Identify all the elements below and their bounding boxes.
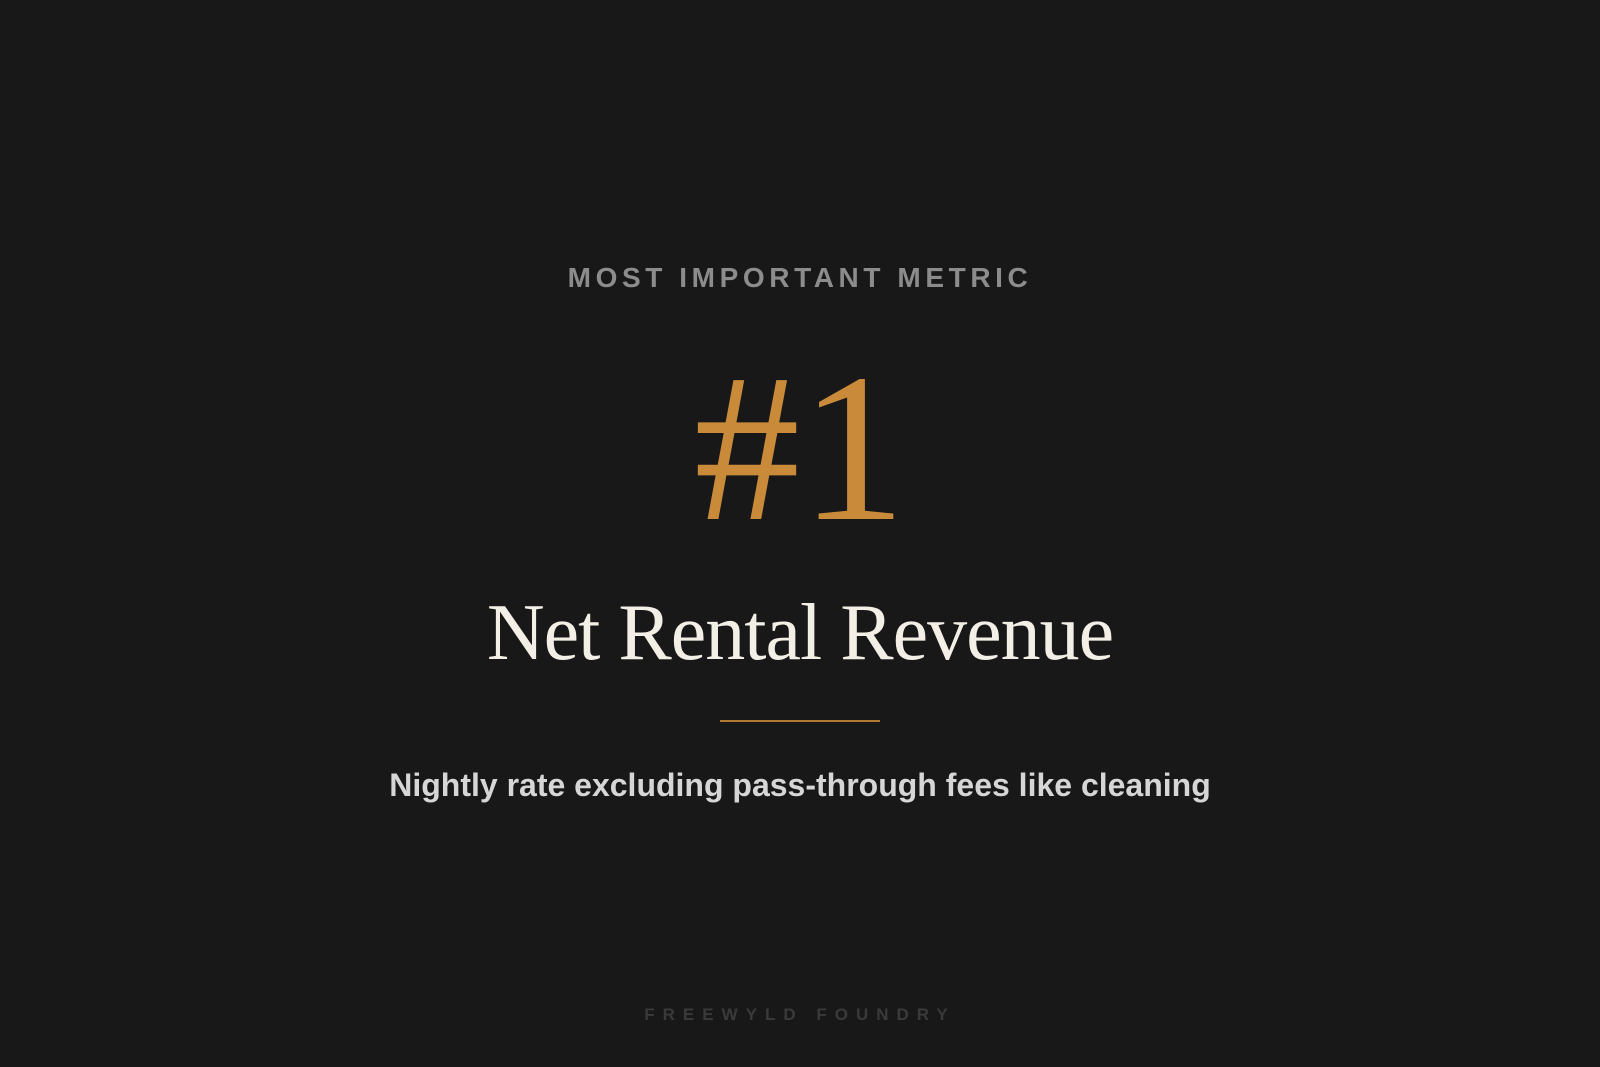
kicker: most important metric: MOST IMPORTANT METRIC [568,262,1032,293]
subtitle description: Nightly rate excluding pass-through fees like cleaning [389,767,1211,803]
big number #1: #1 [694,330,906,565]
divider line [720,720,880,722]
footer brand: FREEWYLD FOUNDRY [644,1005,956,1024]
title: net rental revenue: Net Rental Revenue [487,589,1113,677]
